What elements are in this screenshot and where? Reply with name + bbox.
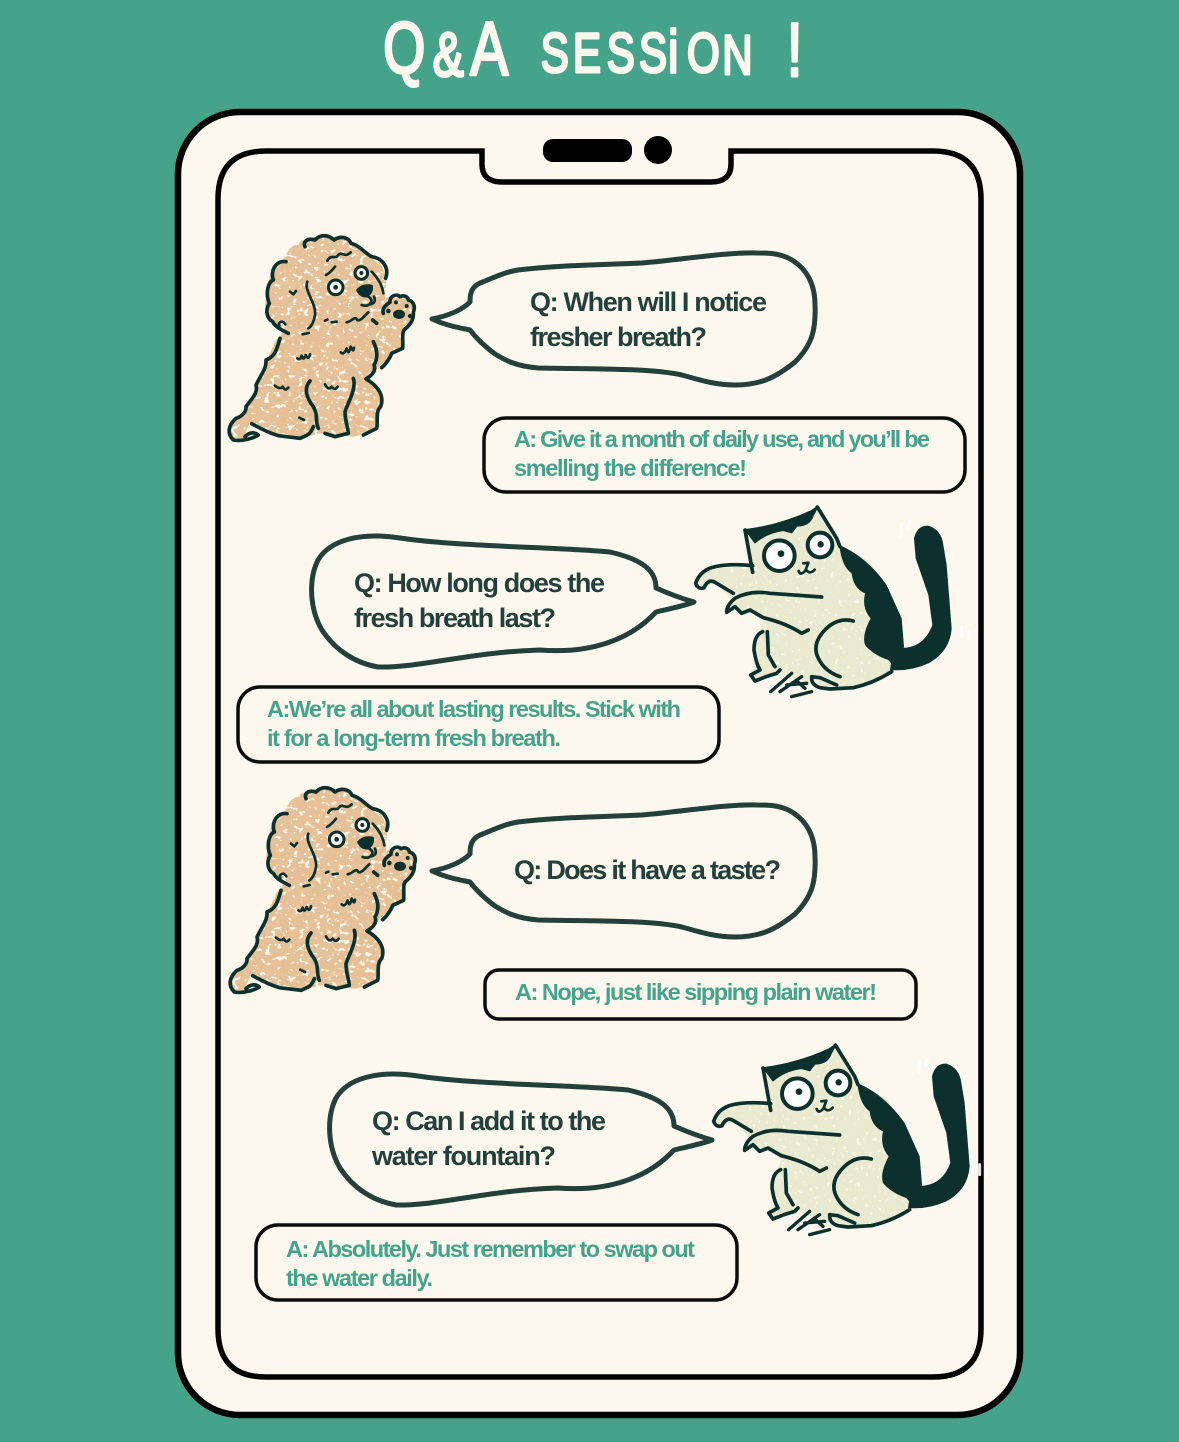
title: ! xyxy=(787,8,803,93)
cat 1 xyxy=(696,507,969,697)
question 4: water fountain? xyxy=(371,1141,556,1171)
question 4: Q: Can I add it to the xyxy=(372,1106,606,1136)
speech bubble 4 xyxy=(330,1074,712,1205)
speech bubble 1 xyxy=(432,253,815,385)
answer 4 xyxy=(256,1225,737,1300)
title: E xyxy=(573,22,601,84)
title: S xyxy=(541,22,569,84)
title: & xyxy=(433,19,464,90)
answer 2: it for a long-term fresh breath. xyxy=(267,725,561,751)
answer 4: A: Absolutely. Just remember to swap out xyxy=(286,1236,695,1262)
title: i xyxy=(668,19,678,86)
answer 1: smelling the difference! xyxy=(514,455,747,481)
question 1: fresher breath? xyxy=(530,322,707,352)
title: A xyxy=(470,7,508,92)
answer 1 xyxy=(484,418,965,492)
answer 2: A:We’re all about lasting results. Stick with xyxy=(267,696,681,722)
answer 4: the water daily. xyxy=(286,1265,433,1291)
phone screen with notch xyxy=(218,151,981,1377)
answer 3 xyxy=(485,970,916,1019)
dog 1 xyxy=(228,236,414,440)
camera xyxy=(644,136,672,164)
question 1: Q: When will I notice xyxy=(530,287,767,317)
title: O xyxy=(687,22,720,84)
question 3: Q: Does it have a taste? xyxy=(514,855,781,885)
question 2: Q: How long does the xyxy=(354,568,605,598)
question 2: fresh breath last? xyxy=(354,603,556,633)
title: Q xyxy=(383,9,425,89)
answer 2 xyxy=(238,687,719,762)
answer 1: A: Give it a month of daily use, and you’ll be xyxy=(514,426,930,452)
phone frame xyxy=(178,112,1020,1415)
cat 2 xyxy=(714,1045,987,1235)
speaker xyxy=(543,139,632,162)
title: N xyxy=(722,24,753,86)
title: S xyxy=(607,22,635,84)
title: S xyxy=(639,22,667,84)
speech bubble 3 xyxy=(432,805,815,937)
answer 3: A: Nope, just like sipping plain water! xyxy=(515,979,877,1005)
speech bubble 2 xyxy=(312,536,694,667)
dog 2 xyxy=(229,788,415,992)
